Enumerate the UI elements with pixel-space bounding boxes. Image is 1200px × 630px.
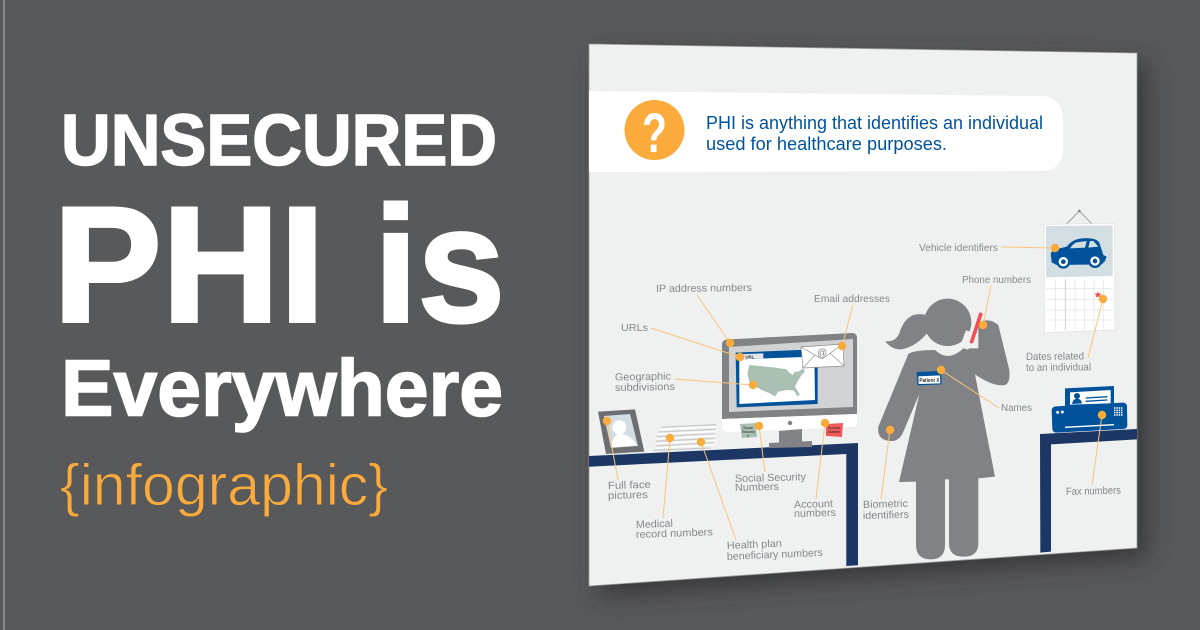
label: IP address numbers: IP address numbers [656, 282, 752, 295]
label: URLs: URLs [621, 322, 648, 334]
subtitle: infographic: {infographic} [60, 453, 388, 518]
title line: PHI: PHI [53, 172, 325, 356]
icon: question mark [624, 100, 684, 164]
US map [747, 365, 805, 397]
label: biometric identifiers [863, 498, 909, 522]
star marker [1094, 291, 1102, 298]
label: social security numbers: Numbers [735, 481, 779, 494]
label: medical record numbers: Medical [636, 518, 673, 531]
label: biometric identifiers: identifiers [863, 509, 909, 522]
car [1051, 238, 1107, 269]
label: medical record numbers: record numbers [636, 526, 713, 541]
sticky note: account [826, 423, 843, 437]
callout dots [603, 244, 1107, 446]
label: social security numbers [735, 471, 807, 494]
label: account numbers: Account [794, 498, 833, 511]
label: dates related to an individual: Dates related [1026, 350, 1084, 363]
name badge: Patient X [919, 378, 940, 384]
label: health plan beneficiary numbers [727, 538, 823, 563]
callout lines [607, 247, 1103, 540]
label: geographic subdivisions: Geographic [615, 371, 671, 383]
icon: picture frame [598, 409, 644, 454]
icon: paper stack [654, 425, 717, 450]
sticky note: social security: Social [743, 426, 753, 430]
label: account numbers: numbers [794, 507, 836, 520]
phone [972, 314, 981, 342]
name badge [917, 371, 942, 385]
label: full face pictures: pictures [608, 489, 648, 502]
label: full face pictures: Full face [608, 479, 651, 492]
sticky note: social security: # [747, 434, 749, 438]
title line: is: is [374, 172, 505, 356]
icon: question mark: ? [642, 101, 667, 164]
icon: calendar with car [1044, 210, 1115, 333]
label: phone numbers: Phone numbers [962, 274, 1031, 286]
icon: fax machine [1052, 386, 1127, 433]
label: names: Names [1001, 402, 1032, 414]
desk: right [1040, 429, 1137, 553]
label: health plan beneficiary numbers: beneficiary numbers [727, 547, 823, 563]
title [53, 101, 505, 518]
banner text: used for healthcare purposes. [706, 134, 947, 154]
label: biometric identifiers: Biometric [863, 498, 908, 511]
label: dates related to an individual: to an individual [1026, 361, 1091, 374]
banner text [706, 113, 1043, 154]
envelope: @ [817, 348, 827, 359]
sticky note: account: Account [828, 426, 840, 430]
label: geographic subdivisions: subdivisions [615, 381, 675, 394]
panel: infographic card [589, 44, 1137, 586]
label: account numbers [794, 498, 836, 520]
sticky note: social security [740, 423, 757, 438]
label: dates related to an individual [1026, 350, 1091, 374]
label: email addresses: Email addresses [814, 293, 890, 305]
sticky note: account: Number [828, 430, 841, 434]
title line: everywhere: Everywhere [61, 344, 503, 432]
banner text: PHI is anything that identifies an individual [706, 113, 1043, 133]
label: vehicle identifiers: Vehicle identifiers [919, 242, 998, 254]
label: fax numbers: Fax numbers [1066, 485, 1121, 498]
monitor stand [769, 429, 812, 448]
banner: PHI definition [589, 91, 1063, 172]
sticky note: social security: Security [742, 430, 755, 434]
label: health plan beneficiary numbers: Health plan [727, 538, 782, 552]
browser window: URL [745, 354, 755, 359]
label: social security numbers: Social Security [735, 471, 807, 485]
label: full face pictures [608, 479, 651, 502]
title line: unsecured: UNSECURED [61, 101, 497, 181]
label: medical record numbers [636, 518, 713, 541]
desk: left [589, 443, 858, 566]
icon: computer monitor [722, 333, 857, 448]
figure: woman on phone [878, 299, 1010, 559]
label: geographic subdivisions [615, 371, 675, 394]
